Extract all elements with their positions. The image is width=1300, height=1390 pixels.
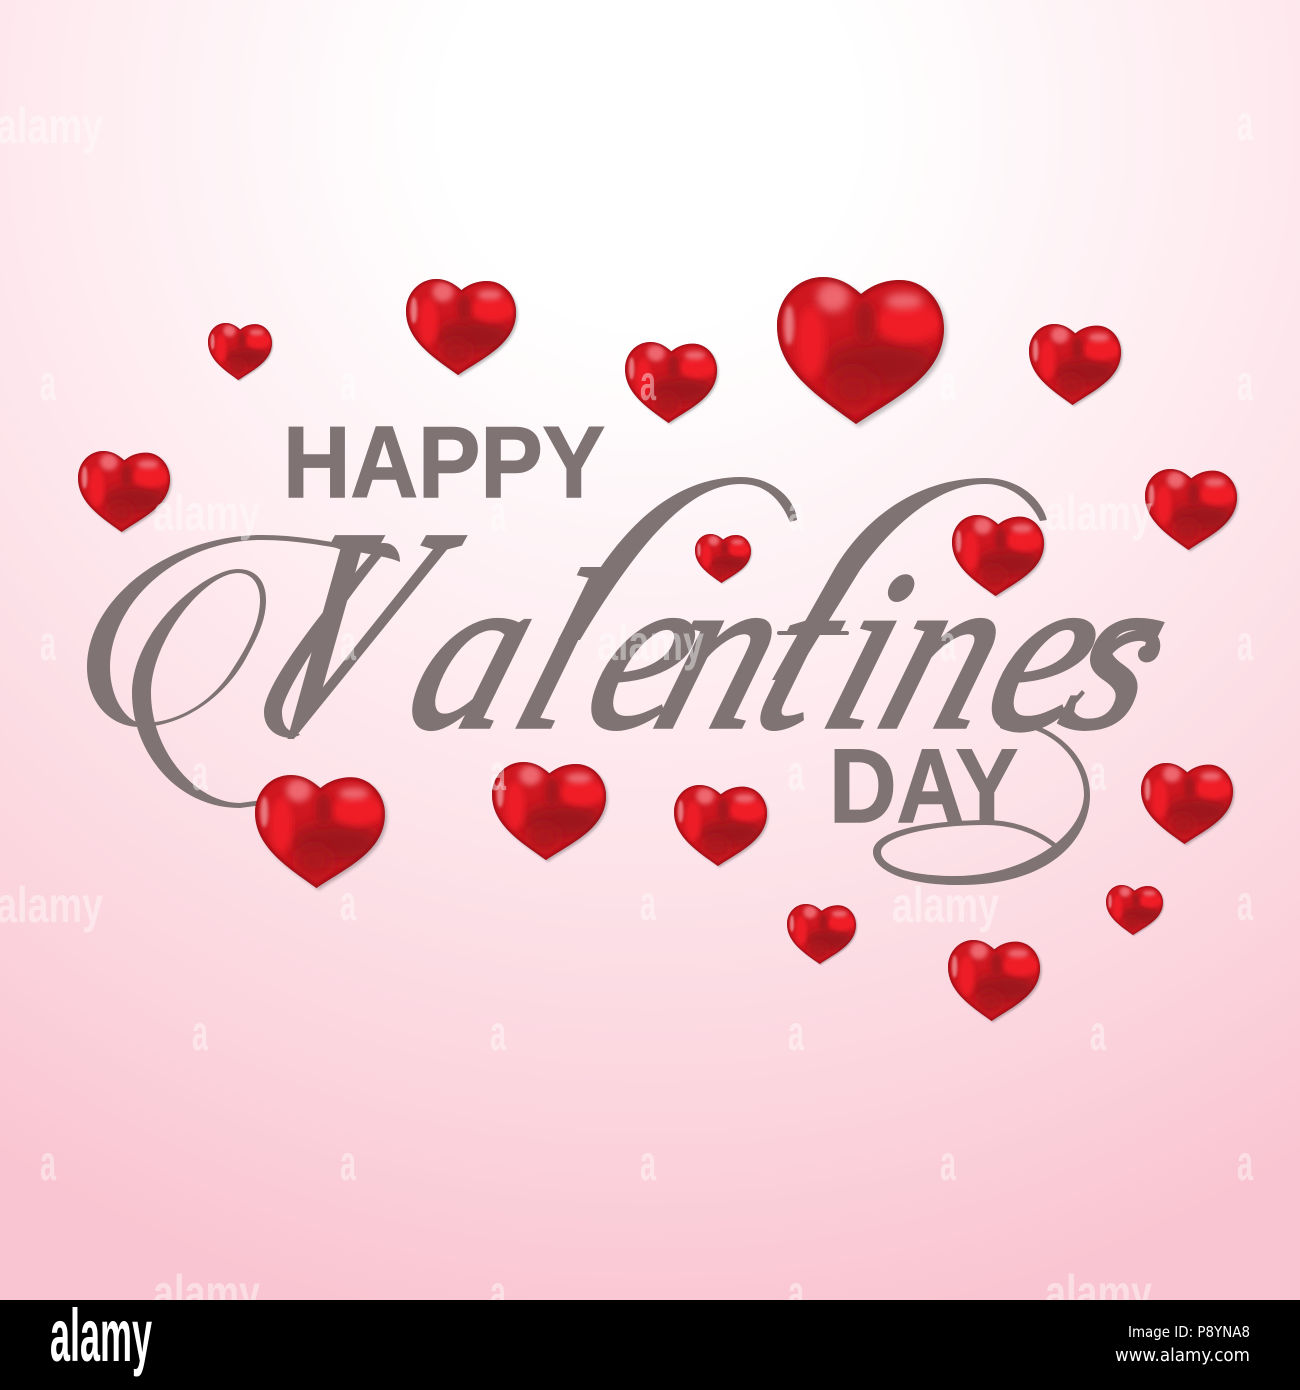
watermark: a — [340, 355, 357, 411]
watermark: alamy — [1045, 485, 1152, 541]
heart 10 — [251, 771, 391, 894]
v thick stroke flourish — [264, 546, 385, 738]
watermark: a — [340, 615, 357, 671]
watermark: a — [640, 1135, 657, 1191]
v swash flourish — [87, 535, 400, 808]
script lowercase alentines: alentines — [383, 525, 1201, 777]
watermark: alamy — [0, 98, 103, 154]
watermark: alamy — [0, 877, 103, 933]
image id: Image ID: P8YNA8 — [1128, 1323, 1250, 1341]
watermark: a — [1237, 95, 1254, 151]
heart 2 — [403, 276, 521, 380]
heart 13 — [1138, 760, 1237, 848]
watermark: a — [490, 485, 507, 541]
watermark: alamy — [597, 615, 704, 671]
heart 8 — [949, 512, 1048, 600]
watermark: a — [1237, 1135, 1254, 1191]
watermark: a — [340, 875, 357, 931]
heart 15 — [1104, 883, 1166, 938]
watermark: a — [40, 1135, 57, 1191]
l ascender flourish — [558, 477, 797, 640]
watermark: alamy — [1045, 1265, 1152, 1321]
watermark: a — [788, 745, 805, 801]
t crossbar — [777, 631, 849, 635]
heart 7 — [1142, 466, 1241, 554]
watermark: a — [940, 615, 957, 671]
heart 14 — [785, 902, 859, 967]
watermark: a — [640, 355, 657, 411]
watermark: alamy — [153, 1265, 260, 1321]
footer bar: alamy — [50, 1294, 152, 1377]
watermark: a — [192, 745, 209, 801]
heart 12 — [671, 782, 771, 870]
heart 16 — [945, 937, 1044, 1025]
watermark: a — [1090, 745, 1107, 801]
watermark: a — [40, 355, 57, 411]
e to s joining stroke — [1000, 690, 1085, 733]
t ascender flourish — [772, 478, 1047, 680]
watermark: a — [1237, 355, 1254, 411]
watermark: a — [490, 1005, 507, 1061]
watermark: a — [940, 355, 957, 411]
watermark: a — [1237, 875, 1254, 931]
watermark: a — [40, 615, 57, 671]
watermark: a — [788, 485, 805, 541]
watermark: a — [788, 1265, 805, 1321]
day flourish — [873, 722, 1090, 885]
heart 4 — [772, 272, 952, 432]
watermark: a — [490, 745, 507, 801]
heart 11 — [489, 759, 612, 865]
s terminal hook — [1105, 630, 1160, 662]
script capital v: V — [211, 465, 499, 798]
watermark: a — [340, 1135, 357, 1191]
watermark: a — [788, 1005, 805, 1061]
headline lettering — [87, 407, 1201, 885]
heart 5 — [1026, 321, 1125, 409]
watermark: a — [1090, 1005, 1107, 1061]
footer bar — [0, 1294, 1300, 1390]
watermark: a — [192, 1005, 209, 1061]
watermark: a — [490, 1265, 507, 1321]
heart 6 — [75, 448, 174, 536]
watermark: alamy — [892, 877, 999, 933]
heart 3 — [622, 339, 721, 427]
watermark: a — [640, 875, 657, 931]
happy heading: HAPPY — [283, 407, 605, 519]
watermark: a — [940, 1135, 957, 1191]
watermark: alamy — [153, 485, 260, 541]
watermark: a — [1237, 615, 1254, 671]
day word: DAY — [829, 728, 1018, 845]
heart 9 — [693, 532, 754, 586]
heart 1 — [206, 321, 275, 383]
site url: www.alamy.com — [1115, 1345, 1250, 1366]
